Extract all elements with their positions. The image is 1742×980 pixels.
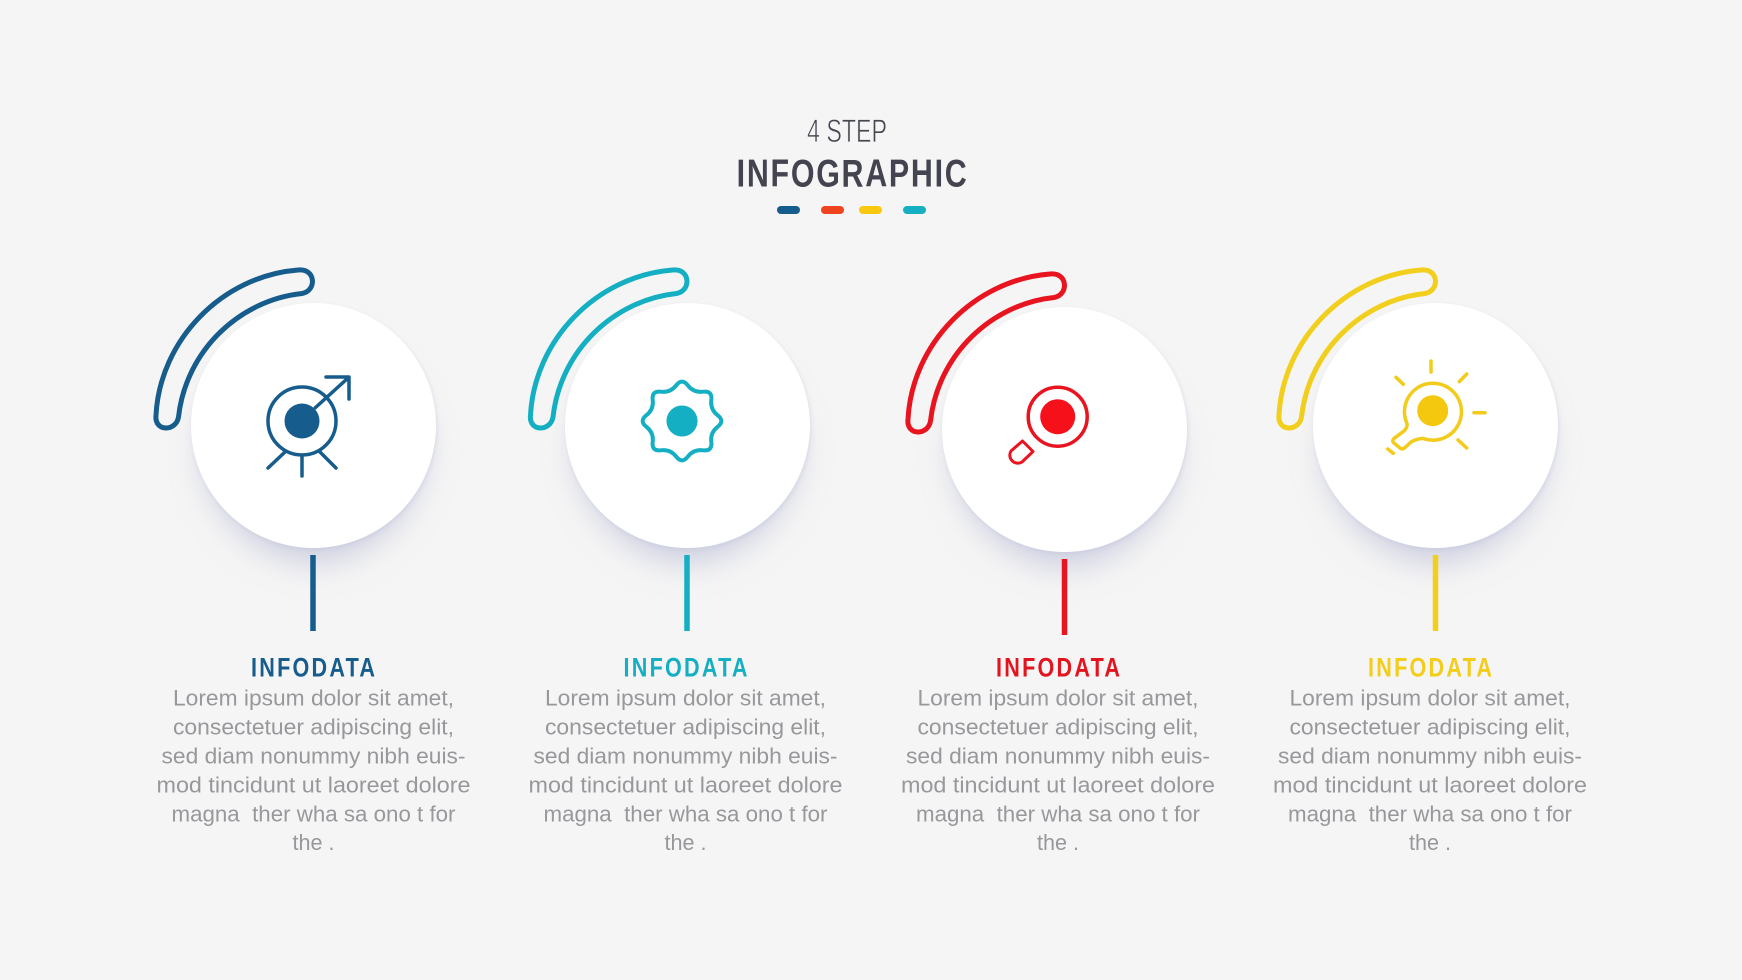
body text: [156, 686, 470, 855]
icon: target with arrow: [268, 377, 349, 476]
white circle: [942, 307, 1187, 552]
arc tab: [530, 270, 687, 428]
heading: INFODATA: [251, 653, 375, 683]
colour key dots: [777, 206, 926, 214]
body text: [901, 686, 1215, 855]
panel: step 1: [156, 270, 471, 855]
body text: consectetuer adipiscing elit,: [173, 715, 454, 740]
body text: magna ther wha sa ono t for: [1288, 801, 1572, 826]
body text: [1273, 686, 1587, 855]
heading: INFODATA: [996, 653, 1120, 683]
heading: INFODATA: [1368, 653, 1492, 683]
connector line: [1062, 559, 1067, 635]
white circle: [1313, 303, 1558, 548]
body text: Lorem ipsum dolor sit amet,: [1290, 686, 1570, 711]
body text: consectetuer adipiscing elit,: [1290, 715, 1570, 740]
body text: magna ther wha sa ono t for: [172, 801, 456, 826]
title block: [737, 113, 967, 214]
body text: sed diam nonummy nibh euis-: [906, 744, 1210, 768]
arc tab: [908, 274, 1064, 432]
panel: step 3: [901, 274, 1215, 855]
body text: mod tincidunt ut laoreet dolore: [901, 772, 1215, 797]
heading: INFODATA: [623, 653, 748, 683]
body text: Lorem ipsum dolor sit amet,: [173, 686, 454, 711]
title: INFOGRAPHIC: INFOGRAPHIC: [737, 152, 967, 195]
body text: mod tincidunt ut laoreet dolore: [156, 772, 470, 797]
icon: light bulb: [1388, 361, 1485, 453]
connector line: [310, 555, 316, 631]
panel: step 2: [528, 270, 842, 855]
white circle: [565, 303, 810, 548]
body text: mod tincidunt ut laoreet dolore: [1273, 772, 1587, 797]
connector line: [684, 555, 690, 631]
title: 4 STEP: 4 STEP: [807, 113, 887, 149]
body text: Lorem ipsum dolor sit amet,: [918, 686, 1198, 711]
connector line: [1433, 555, 1438, 631]
arc tab: [1279, 270, 1435, 428]
body text: magna ther wha sa ono t for: [916, 801, 1200, 826]
icon: magnifier: [1010, 387, 1087, 463]
panel: step 4: [1273, 270, 1587, 855]
body text: sed diam nonummy nibh euis-: [162, 744, 466, 768]
body text: magna ther wha sa ono t for: [544, 801, 828, 826]
body text: consectetuer adipiscing elit,: [918, 715, 1198, 740]
arc tab: [156, 270, 312, 428]
icon: gear: [643, 382, 721, 460]
body text: the .: [292, 830, 334, 855]
body text: sed diam nonummy nibh euis-: [1278, 744, 1582, 768]
body text: [528, 686, 842, 855]
white circle: [191, 303, 436, 548]
body text: the .: [1409, 830, 1451, 855]
body text: mod tincidunt ut laoreet dolore: [528, 772, 842, 797]
body text: sed diam nonummy nibh euis-: [534, 744, 838, 768]
body text: the .: [664, 830, 706, 855]
body text: consectetuer adipiscing elit,: [545, 715, 826, 740]
body text: Lorem ipsum dolor sit amet,: [545, 686, 826, 711]
body text: the .: [1037, 830, 1079, 855]
